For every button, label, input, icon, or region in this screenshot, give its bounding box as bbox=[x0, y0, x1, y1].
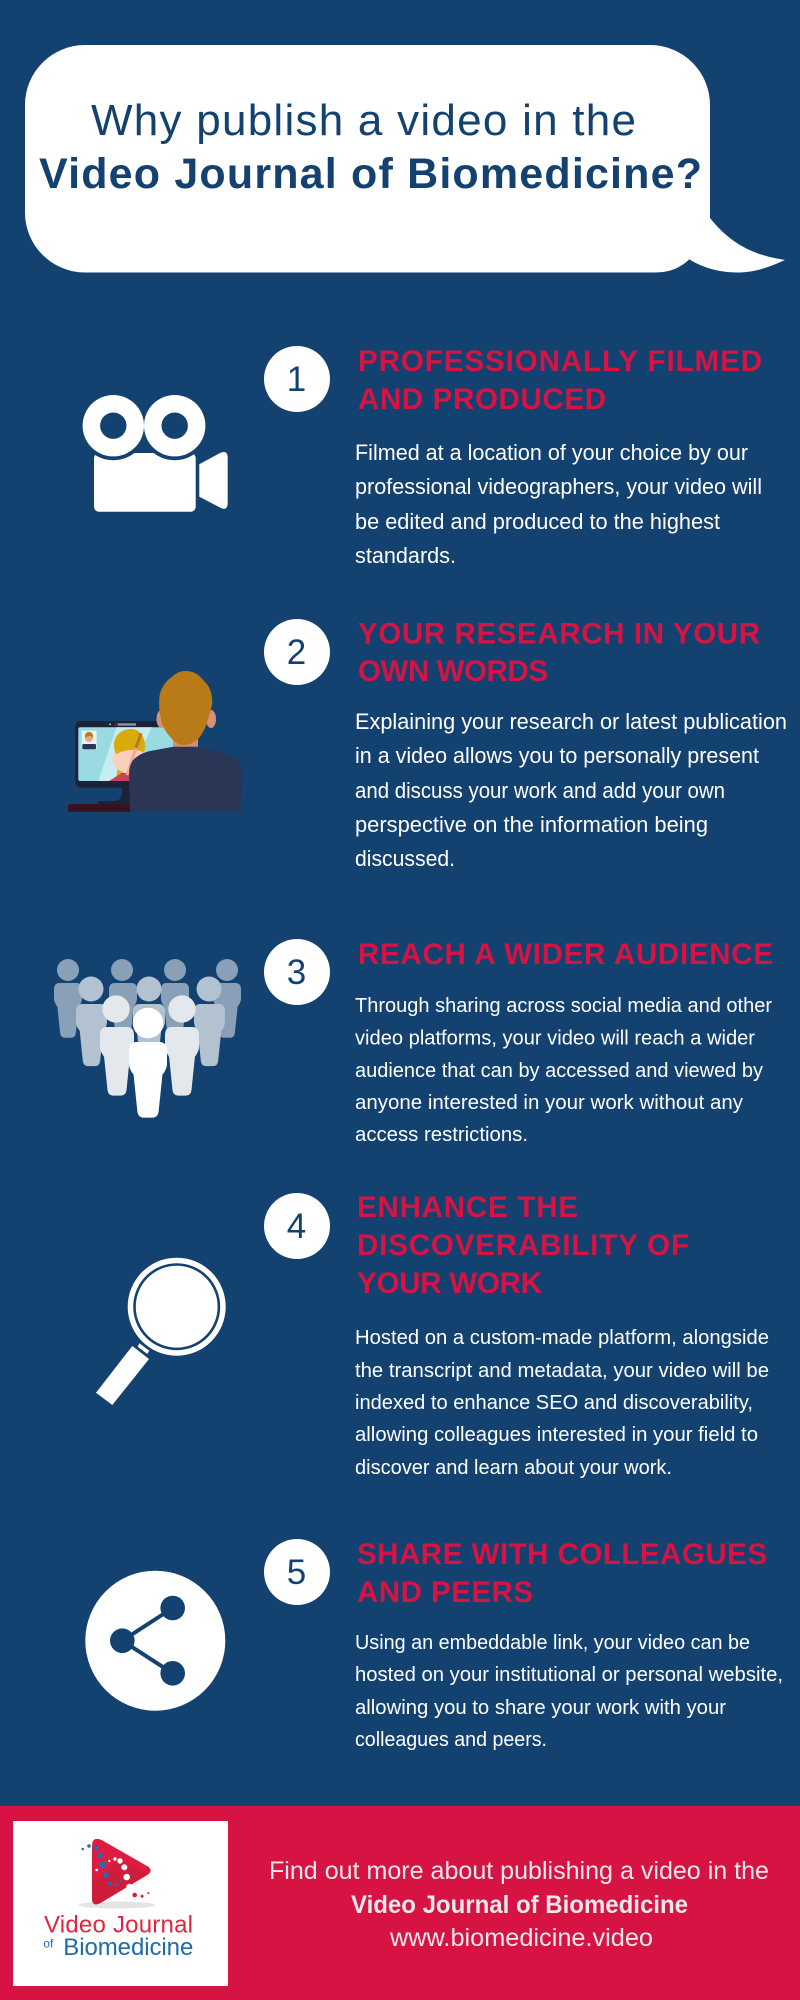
icon: magnifying glass bbox=[96, 1258, 226, 1405]
body text 4 bbox=[355, 1327, 769, 1479]
body text 3: access restrictions. bbox=[355, 1124, 528, 1146]
thumbnail bbox=[82, 731, 97, 749]
section 2: your research bbox=[68, 618, 787, 871]
heading 5 bbox=[357, 1538, 767, 1609]
footer text: Find out more about publishing a video in the bbox=[269, 1857, 769, 1885]
logo play icon bbox=[79, 1839, 155, 1908]
body text 4: discover and learn about your work. bbox=[355, 1457, 672, 1479]
body text 4: the transcript and metadata, your video will be bbox=[355, 1360, 769, 1382]
body text 2: Explaining your research or latest publication bbox=[355, 709, 787, 734]
body text 5: allowing you to share your work with your bbox=[355, 1697, 726, 1719]
icon: share bbox=[85, 1571, 225, 1711]
heading 4 bbox=[357, 1191, 689, 1300]
heading 2 bbox=[358, 618, 760, 688]
body text 1 bbox=[355, 440, 762, 568]
number badge 2: 2 bbox=[287, 633, 306, 672]
footer text: Video Journal of Biomedicine bbox=[351, 1891, 688, 1919]
body text 3: anyone interested in your work without any bbox=[355, 1092, 743, 1114]
body text 5: colleagues and peers. bbox=[355, 1729, 547, 1751]
body text 2: and discuss your work and add your own bbox=[355, 778, 725, 803]
heading 4: ENHANCE THE bbox=[357, 1191, 578, 1224]
heading 4: YOUR WORK bbox=[357, 1267, 543, 1300]
body text 2: discussed. bbox=[355, 846, 455, 871]
number badge 5: 5 bbox=[287, 1553, 306, 1592]
body text 5: hosted on your institutional or personal website, bbox=[355, 1664, 783, 1686]
icon: video camera bbox=[79, 391, 228, 512]
section 3: wider audience bbox=[54, 938, 773, 1146]
body text 5: Using an embeddable link, your video can be bbox=[355, 1632, 750, 1654]
body text 2: perspective on the information being bbox=[355, 812, 708, 837]
body text 3: audience that can by accessed and viewed by bbox=[355, 1060, 763, 1082]
section 4: discoverability bbox=[96, 1191, 769, 1479]
heading 5: SHARE WITH COLLEAGUES bbox=[357, 1538, 767, 1571]
title text: Why publish a video in the bbox=[91, 96, 636, 145]
logo box bbox=[13, 1821, 228, 1986]
section 5: share bbox=[85, 1538, 783, 1751]
heading 5: AND PEERS bbox=[357, 1576, 533, 1609]
heading 2: YOUR RESEARCH IN YOUR bbox=[358, 618, 760, 650]
body text 3: Through sharing across social media and other bbox=[355, 995, 772, 1017]
number badge 4: 4 bbox=[287, 1207, 306, 1246]
body text 3: video platforms, your video will reach a wider bbox=[355, 1028, 755, 1050]
footer text: www.biomedicine.video bbox=[389, 1924, 653, 1952]
desk and monitor bbox=[68, 721, 180, 812]
footer text bbox=[269, 1857, 769, 1952]
section 1: professionally filmed bbox=[79, 345, 762, 568]
heading 3: REACH A WIDER AUDIENCE bbox=[358, 938, 773, 971]
body text 1: professional videographers, your video will bbox=[355, 474, 762, 499]
body text 2: in a video allows you to personally present bbox=[355, 743, 759, 768]
heading 1: AND PRODUCED bbox=[358, 383, 606, 416]
body text 3 bbox=[355, 995, 772, 1146]
body text 1: Filmed at a location of your choice by our bbox=[355, 440, 748, 465]
heading 1: PROFESSIONALLY FILMED bbox=[358, 345, 762, 378]
body text 4: allowing colleagues interested in your field to bbox=[355, 1424, 758, 1446]
number badge 5 bbox=[264, 1539, 330, 1605]
title speech bubble bbox=[25, 45, 785, 272]
body text 2 bbox=[355, 709, 787, 871]
footer banner bbox=[0, 1806, 800, 2000]
heading 4: DISCOVERABILITY OF bbox=[357, 1229, 689, 1262]
body text 1: standards. bbox=[355, 543, 456, 568]
title text: Video Journal of Biomedicine? bbox=[39, 150, 702, 198]
number badge 4 bbox=[264, 1193, 330, 1259]
number badge 1 bbox=[264, 346, 330, 412]
logo wordmark: Biomedicine bbox=[63, 1934, 193, 1961]
body text 4: indexed to enhance SEO and discoverability, bbox=[355, 1392, 753, 1414]
icon: crowd of people bbox=[54, 959, 241, 1118]
body text 1: be edited and produced to the highest bbox=[355, 509, 720, 534]
number badge 2 bbox=[264, 619, 330, 685]
woman on screen bbox=[109, 729, 145, 781]
logo wordmark: of bbox=[43, 1936, 54, 1950]
number badge 1: 1 bbox=[287, 360, 306, 399]
number badge 3 bbox=[264, 939, 330, 1005]
body text 4: Hosted on a custom-made platform, alongside bbox=[355, 1327, 769, 1349]
body text 5 bbox=[355, 1632, 783, 1751]
heading 1 bbox=[358, 345, 762, 416]
logo wordmark: Video Journal bbox=[44, 1912, 193, 1938]
title text bbox=[39, 96, 702, 198]
icon: person at video call bbox=[68, 671, 242, 812]
man from behind bbox=[129, 671, 242, 812]
heading 2: OWN WORDS bbox=[358, 655, 548, 688]
logo wordmark bbox=[43, 1912, 193, 1961]
number badge 3: 3 bbox=[287, 953, 306, 992]
